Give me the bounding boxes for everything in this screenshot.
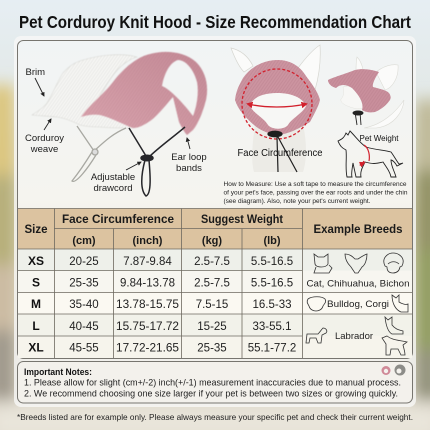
label: brim: Brim [26,67,45,78]
icon: pink hood on mannequin [235,60,320,135]
icon: white corduroy hood [32,55,137,128]
table header text [24,214,402,247]
icon: dog weight outline [338,131,403,177]
icon: mannequin face [250,93,306,129]
text block: how to measure: How to Measure: Use a soft tape to measure the circumference [224,181,407,188]
table values: 35-40 [69,299,99,311]
size column: L [32,319,40,333]
label: corduroy weave: Corduroy [25,133,64,144]
icon: chihuahua [345,254,367,273]
table values: 7.5-15 [196,299,228,311]
icon: grey drawcord [72,126,126,181]
size table [18,208,412,358]
size column: S [32,276,40,290]
panel: face circumference photo [231,45,323,172]
table header text: Suggest Weight [201,214,283,226]
label: adjustable drawcord: drawcord [93,183,133,194]
icon: side view ears [356,57,404,128]
table values: 2.5-7.5 [194,256,230,268]
icon: mannequin ears [231,45,320,90]
breed icons [306,253,408,355]
table values: 40-45 [69,321,99,333]
table values: 5.5-16.5 [251,278,293,290]
table header text: (kg) [202,235,222,247]
label: brim [26,67,45,96]
text block: how to measure [224,181,408,205]
notes heading: Important Notes: [24,367,92,377]
breed labels: Bulldog, Corgi [327,299,389,310]
notes list: 1. Please allow for slight (cm+/-2) inch(+/-1) measurement inaccuracies due to manual process. [24,378,401,388]
breed labels: Cat, Chihuahua, Bichon [306,278,410,290]
icon: corgi standing [385,317,403,334]
table values: 25-35 [197,342,227,354]
table values: 16.5-33 [252,299,292,311]
table header [18,208,412,249]
icon: small hoods [382,364,406,376]
table values: 5.5-16.5 [251,256,293,268]
table values: 17.72-21.65 [116,342,179,354]
label: measuring girth [360,145,369,165]
table values: 45-55 [69,342,99,354]
table grid [18,208,412,358]
size column: XL [28,340,44,354]
label: ear loop bands: bands [176,163,202,174]
panel: side view photo [328,57,404,128]
text block: how to measure: of your pet's face, passing over the ear roots and under the chin [224,190,408,196]
icon: side view cords [353,111,363,125]
breed labels [306,278,410,342]
icon: dachshund [306,328,327,343]
table values: 25-35 [69,278,99,290]
notes list [24,378,401,398]
icon: corgi head [392,295,408,312]
icon: cat [314,254,332,273]
table values: 20-25 [69,256,99,268]
table values: 9.84-13.78 [120,278,175,290]
table values [69,256,296,354]
table header text: (inch) [133,235,163,247]
label: adjustable drawcord [91,162,141,194]
label: ear loop bands: Ear loop [171,152,207,163]
notes list: 2. We recommend choosing one size larger if your pet is between two sizes or growing quickly. [24,388,398,398]
table values: 15.75-17.72 [116,321,179,333]
table header text: Size [24,224,48,236]
table header text: Face Circumference [62,214,174,226]
size column: M [31,297,41,311]
table values: 15-25 [197,321,227,333]
size column [28,254,44,354]
table values: 55.1-77.2 [248,342,296,354]
label: corduroy weave: weave [30,144,58,155]
icon: bichon [384,253,403,273]
icon: labrador [382,336,407,355]
table values: 7.87-9.84 [123,256,172,268]
icon: bulldog [307,297,326,311]
table header text: (lb) [263,235,281,247]
label: adjustable drawcord: Adjustable [91,172,135,183]
label: corduroy weave [25,119,64,155]
footnote: *Breeds listed are for example only. Please always measure your specific pet and check their current weight. [17,412,413,422]
icon: black drawcord [129,127,185,196]
icon: toggle and cords [268,131,297,172]
table values: 33-55.1 [252,321,292,333]
panel: important notes [18,362,412,403]
icon: side view head [341,84,372,109]
size column: XS [28,254,44,268]
table body rows [18,249,412,358]
icon: mannequin neck [252,125,306,172]
table header text: Example Breeds [314,224,402,236]
icon: face measuring tape [242,69,312,139]
panel: hood product view [25,52,207,196]
breed labels: Labrador [335,331,373,342]
label: ear loop bands [171,138,207,174]
icon: side view pink hood [328,69,391,112]
icon: pink corduroy hood [81,52,207,135]
table values: 13.78-15.75 [116,299,179,311]
label: face circumference: Face Circumference [238,148,323,159]
table values: 2.5-7.5 [194,278,230,290]
text block: how to measure: (see diagram). Also, note your pet's current weight. [224,198,371,205]
table header text: (cm) [72,235,96,247]
label: pet weight: Pet Weight [360,133,399,143]
